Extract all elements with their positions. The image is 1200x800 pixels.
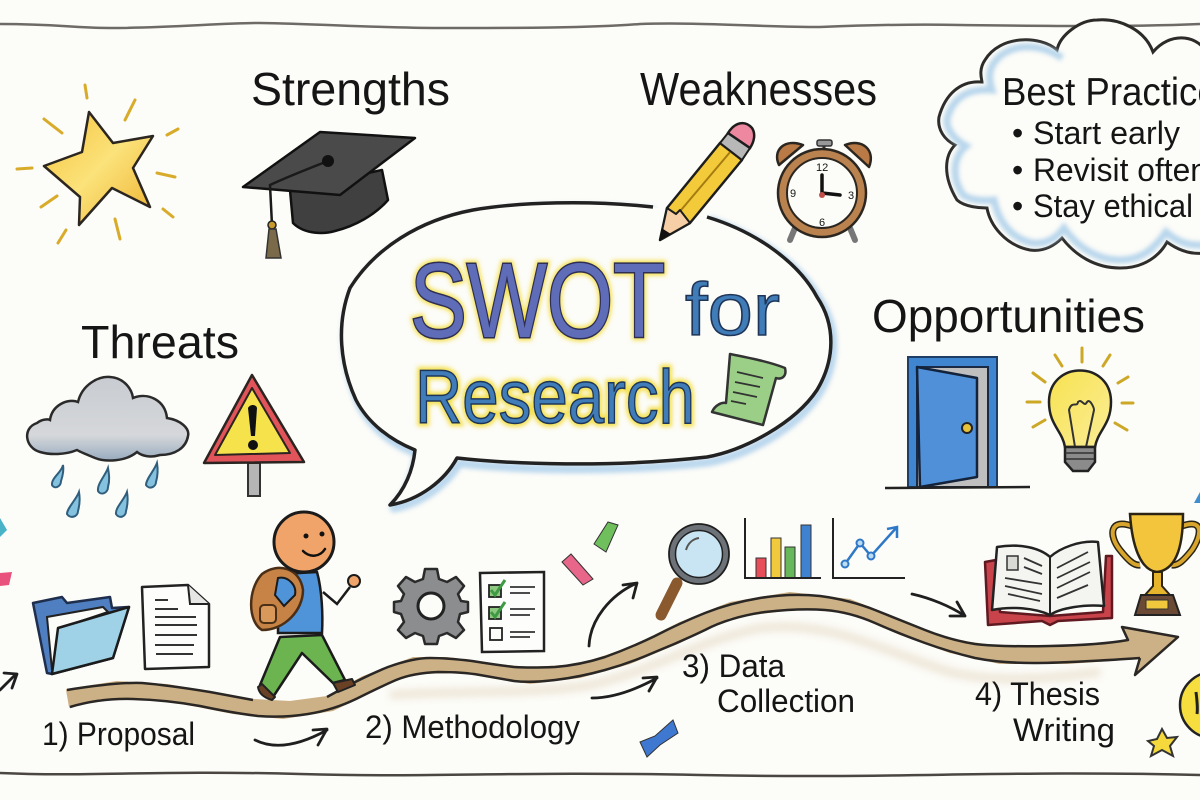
step label: 1) Proposal: 1) Proposal: [42, 716, 195, 752]
icon: warning sign: [204, 375, 304, 496]
icon: gold star with rays: [17, 85, 178, 243]
icon: green scroll: [712, 354, 785, 425]
legs: [260, 635, 345, 697]
heading: Threats: Threats: [81, 316, 239, 368]
icon: light bulb: [1027, 348, 1133, 471]
icon: small star: [1148, 729, 1177, 756]
callout list: Stay ethical: [1033, 188, 1193, 224]
icon: magnifying glass: [661, 524, 729, 615]
central speech bubble: [341, 203, 833, 508]
torso: [278, 572, 322, 633]
callout list: Start early: [1033, 115, 1180, 151]
title: Research: Research: [415, 355, 695, 440]
title glow: [410, 242, 695, 440]
bar chart: [745, 518, 821, 578]
backpack: [251, 568, 303, 630]
icon: smiley face: [1180, 672, 1200, 738]
icon: alarm clock: 6: [819, 217, 825, 229]
callout list: [1012, 115, 1200, 224]
shoes: [258, 679, 355, 700]
walking student: [251, 512, 360, 700]
step label: 4) Thesis Writing: 4) Thesis: [975, 676, 1100, 712]
icon: document: [142, 585, 209, 669]
heading: Strengths: Strengths: [251, 63, 450, 115]
head: [274, 512, 334, 572]
title glow: Research: [415, 355, 695, 440]
icon: alarm clock: 3: [848, 190, 854, 202]
icon: open blue door: [885, 357, 1030, 488]
icon: rain cloud: [27, 377, 188, 517]
icon: pencil: [660, 123, 754, 240]
step label: 3) Data Collection: [682, 648, 855, 719]
icon: alarm clock: 9: [790, 188, 796, 200]
line chart: [833, 518, 905, 578]
heading: Opportunities: Opportunities: [872, 290, 1145, 342]
progress path arrow: [67, 593, 1178, 718]
confetti pieces: [0, 492, 1200, 757]
step label: 2) Methodology: 2) Methodology: [365, 709, 580, 745]
step label: 3) Data Collection: 3) Data: [682, 648, 785, 684]
step label: 3) Data Collection: Collection: [717, 683, 855, 719]
title: SWOT: SWOT: [410, 242, 665, 360]
title glow: SWOT: [410, 242, 665, 360]
cloud callout: Best Practices: [939, 20, 1200, 268]
icon: alarm clock: [777, 140, 871, 240]
heading: Weaknesses: Weaknesses: [640, 63, 877, 115]
icon: graduation cap: [243, 132, 415, 258]
title: for: for: [685, 268, 780, 351]
step label: 4) Thesis Writing: Writing: [1013, 712, 1115, 748]
icon: checklist: [480, 572, 544, 652]
step label: 4) Thesis Writing: [975, 676, 1115, 748]
callout list: •: [1012, 115, 1023, 151]
icon: alarm clock: 12: [816, 162, 828, 174]
arm: [323, 587, 350, 604]
icon: open book: [985, 542, 1112, 625]
icon: folder: [33, 597, 129, 674]
icon: gear: [394, 569, 468, 644]
callout list: •: [1012, 188, 1023, 224]
callout list: •: [1012, 152, 1023, 188]
icon: trophy: [1113, 514, 1199, 615]
arrows between steps: [0, 583, 965, 745]
